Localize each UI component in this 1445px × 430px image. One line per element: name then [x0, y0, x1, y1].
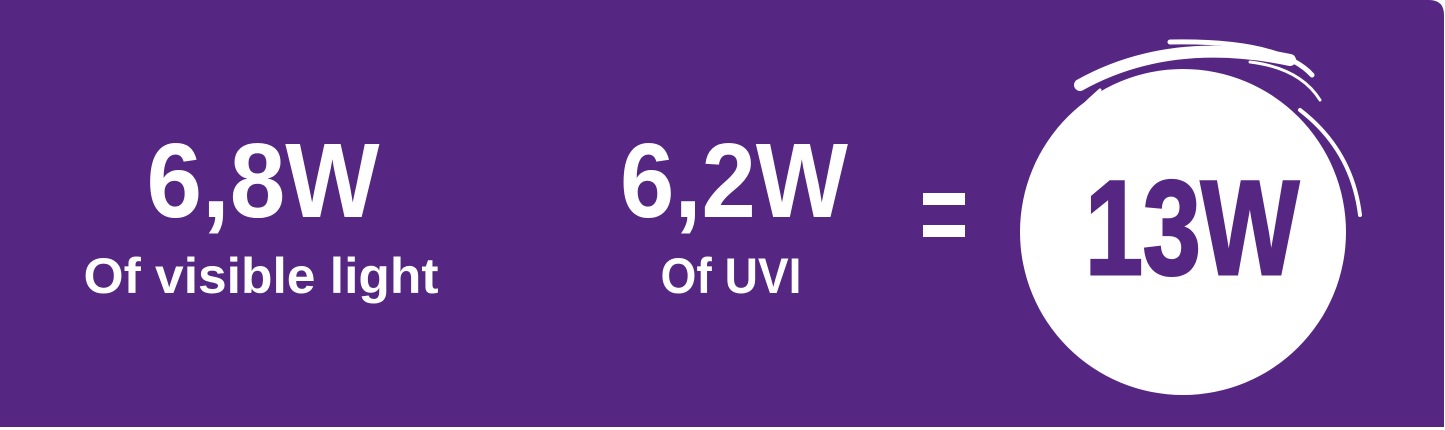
value 6,8W: 6,8W	[146, 122, 380, 240]
value 6,2W: 6,2W	[620, 122, 848, 240]
white circle	[1020, 69, 1346, 395]
total 13W: 13W	[1085, 154, 1299, 303]
label UVI: Of UVI	[660, 248, 802, 304]
brush strokes	[1030, 42, 1360, 345]
text block: visible light	[84, 122, 439, 304]
equals sign	[923, 193, 965, 237]
label visible light: Of visible light	[84, 248, 439, 304]
brush circle with total	[1020, 42, 1360, 395]
text block: UVI	[620, 122, 848, 304]
